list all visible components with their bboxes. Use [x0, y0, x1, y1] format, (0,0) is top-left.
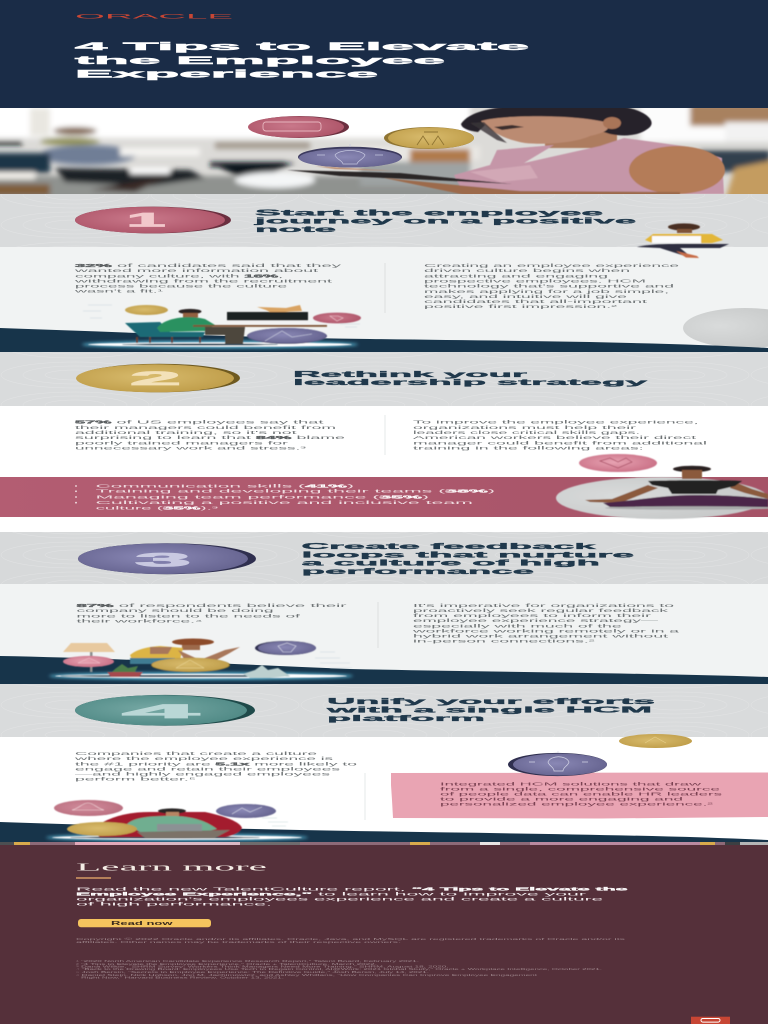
dark wave — [0, 328, 768, 352]
coin: heart — [579, 454, 657, 472]
footnotes: ² “4 Tips to Elevate the Employee Experience,” Oracle + TalentCulture, March 2022. — [76, 962, 378, 966]
right text: manager could benefit from additional — [413, 440, 707, 445]
right text — [424, 263, 682, 309]
right text: driven culture begins when — [424, 268, 633, 273]
copyright: Copyright © 2022 Oracle and/or its affiliates. Oracle, Java, and MySQL are registered trademarks of Oracle and/or its — [76, 937, 627, 941]
coin: gold top right — [619, 734, 692, 748]
feedback illustration — [49, 638, 353, 680]
grey circle — [683, 308, 768, 348]
pink callout: Integrated HCM solutions that draw — [440, 781, 705, 786]
blurred office background — [0, 108, 768, 194]
heading 2 — [293, 370, 650, 387]
neck — [545, 130, 617, 148]
title — [75, 41, 529, 80]
coin: chat — [248, 116, 349, 138]
number coin 3 — [78, 543, 256, 574]
footnotes: ⁵ Josh Bersin, “Secrets to Employee Experience: The Definitive Guide,” Josh Bersin, July 14, 2021. — [76, 970, 430, 974]
heading 4: Unify your efforts — [327, 697, 658, 706]
right text: technology that's supportive and — [424, 284, 677, 289]
left text: where the employee experience is — [75, 756, 333, 761]
section 2 content — [0, 406, 768, 532]
pink callout: from a single, comprehensive source — [440, 786, 723, 791]
left text: the #1 priority are 5.1x more likely to — [75, 761, 360, 766]
heading 3: a culture of high — [302, 559, 600, 568]
plant — [107, 664, 143, 677]
coin: chart — [247, 328, 327, 344]
footnotes: Right Now,” Harvard Business Review, October 13, 2021. — [81, 976, 285, 980]
report paragraph: of high performance. — [76, 902, 272, 907]
coin: gold — [151, 658, 230, 672]
person — [172, 638, 214, 646]
forearm — [384, 178, 680, 196]
monitor — [227, 312, 308, 321]
illustration: woman with laptop — [637, 223, 729, 258]
pink callout: personalized employee experience.² — [440, 802, 715, 807]
lamp — [63, 643, 115, 672]
Oracle logo: ORACLE — [75, 14, 233, 21]
footnotes: ³ Dana Wilkie, “SHRM Survey: Workers Think Managers Need More Training,” SHRM, August 18, 2020. — [76, 964, 449, 968]
arm — [629, 146, 725, 194]
number coin 1 — [75, 207, 231, 233]
left text: wasn't a fit.¹ — [75, 289, 165, 294]
number coin 4 — [75, 695, 255, 726]
heading 4: with a single HCM — [322, 705, 654, 714]
heading 2: leadership strategy — [293, 378, 650, 387]
left text: their workforce.⁴ — [76, 618, 203, 623]
number coin 2: 2 — [130, 368, 182, 390]
left text: perform better.⁵ — [75, 776, 197, 781]
heading 4 — [322, 697, 658, 723]
footnotes — [76, 959, 603, 980]
right text: from employees to inform their — [413, 613, 654, 618]
oracle badge — [691, 1017, 730, 1024]
pink callout: to provide a more engaging and — [440, 797, 686, 802]
face — [481, 116, 608, 144]
rose panel with skills list — [0, 477, 768, 517]
coin: pink — [63, 656, 114, 667]
number coin 1: 1 — [126, 210, 166, 232]
right text: leaders close critical skills gaps. — [413, 430, 640, 435]
right text: workforce working remotely or in a — [413, 629, 682, 634]
right text: It's imperative for organizations to — [413, 603, 677, 608]
heading 1 — [250, 208, 639, 234]
rose panel with skills list: Training and developing their teams ( 38% ) — [96, 489, 498, 494]
right text: American workers believe their direct — [413, 435, 699, 440]
left text: 57% of US employees say that — [75, 420, 327, 425]
legs — [603, 495, 768, 507]
coin: people — [125, 305, 168, 315]
right text: attracting and engaging — [424, 273, 611, 278]
cat — [257, 305, 302, 312]
left text: poorly trained managers for — [75, 440, 290, 445]
heading 3 — [302, 542, 637, 576]
right text: positive first impression.² — [424, 304, 620, 309]
footnotes: ¹ “2020 North American Candidate Experience Research Report,” Talent Board, February 2021. — [76, 959, 420, 963]
section 2 heading band — [0, 352, 768, 406]
right text: especially with much of the — [413, 623, 624, 628]
left text — [76, 603, 349, 623]
section 4 content — [0, 734, 768, 843]
header panel — [0, 0, 768, 108]
rose panel with skills list: culture ( 35% ).³ — [96, 505, 221, 510]
right text: To improve the employee experience, — [413, 420, 698, 425]
man — [178, 309, 202, 314]
section 3 content — [0, 584, 768, 684]
left text — [75, 420, 348, 450]
heading 2: Rethink your — [293, 370, 527, 379]
right text: Creating an employee experience — [424, 263, 682, 268]
heading 1: Start the employee — [255, 208, 606, 218]
title: the Employee — [75, 55, 445, 67]
heading 3: Create feedback — [302, 542, 598, 551]
woman with tablet — [287, 104, 725, 196]
desk — [193, 325, 327, 327]
left text: 32% of candidates said that they — [75, 263, 345, 268]
left text: Companies that create a culture — [75, 751, 320, 756]
footnotes: ⁴ “Back to the Drawing Board: Employees Use Tech to Regain Control, AI@Work: 2021 Global Study,” Oracle + Workplace Intelligence, October 2021. — [76, 967, 603, 971]
copyright — [76, 937, 627, 944]
pink callout — [391, 772, 768, 818]
right text: makes applying for a job simple, — [424, 289, 669, 294]
dark wave — [0, 656, 768, 684]
heading 3: loops that nurture — [302, 550, 637, 559]
number coin 3: 3 — [135, 550, 192, 572]
person — [158, 808, 186, 814]
footer panel — [0, 845, 768, 1024]
heading: learn more: Learn more — [76, 862, 269, 874]
report paragraph: Read the new TalentCulture report, “4 Tips to Elevate the — [76, 886, 630, 891]
button: read now: Read now — [111, 921, 173, 927]
blouse — [454, 138, 724, 194]
glow — [82, 341, 358, 348]
coin: blue — [255, 641, 316, 655]
report paragraph — [76, 886, 630, 907]
heading 1: note — [255, 225, 339, 234]
chair — [125, 322, 205, 337]
report paragraph: organization's employees experience and create a culture — [76, 897, 606, 902]
left text — [75, 751, 360, 781]
left text: more to listen to the needs of — [76, 613, 303, 618]
left text: their managers could benefit from — [75, 425, 338, 430]
left text: company culture, with 16% , — [75, 273, 283, 278]
right text: employee experience strategy— — [413, 618, 661, 623]
rose panel with skills list: Managing team performance ( 35% ) — [96, 494, 432, 499]
heading 3: performance — [302, 567, 537, 576]
back hair — [461, 104, 652, 136]
top — [648, 480, 742, 494]
title: Experience — [75, 68, 378, 80]
rose panel with skills list: Communication skills ( 41% ) — [96, 483, 357, 488]
platform illustration — [46, 800, 308, 841]
left text: withdrawing from the recruitment — [75, 278, 336, 283]
coin: people — [384, 127, 474, 149]
section 3 heading band — [0, 532, 768, 584]
left text — [75, 263, 345, 294]
pink callout: of people data can enable HR leaders — [440, 791, 722, 796]
heading 4: platform — [327, 714, 485, 723]
right text — [413, 420, 707, 450]
left text: —and highly engaged employees — [75, 771, 330, 776]
left text: wanted more information about — [75, 268, 321, 273]
left text: unnecessary work and stress.³ — [75, 445, 308, 450]
dark wave — [0, 822, 768, 843]
right text: organizations must help their — [413, 425, 638, 430]
left text: process because the culture — [75, 283, 290, 288]
report paragraph: Employee Experience,” to learn how to improve your — [76, 891, 589, 896]
section 1 content — [0, 247, 768, 352]
front hair strand — [470, 122, 507, 143]
yoga illustration — [556, 454, 768, 519]
accent rule — [76, 877, 111, 879]
arms — [585, 482, 768, 503]
section 4 heading band — [0, 684, 768, 737]
coin: gold — [67, 822, 137, 836]
coin: bulb — [508, 751, 607, 776]
coin: bulb — [298, 144, 402, 167]
dog — [243, 665, 290, 678]
right text: candidates that all-important — [424, 299, 651, 304]
number coin 4: 4 — [122, 701, 199, 723]
desk illustration — [82, 305, 361, 348]
hero photo — [0, 108, 768, 194]
title: 4 Tips to Elevate — [75, 41, 529, 53]
right text: prospective employees. HCM — [424, 278, 648, 284]
coin: pink — [54, 800, 123, 816]
right text: hybrid work arrangement without — [413, 634, 672, 639]
number coin 2 — [76, 364, 240, 392]
glow — [49, 672, 353, 680]
heading 1: journey on a positive — [250, 217, 639, 226]
coin: blue — [216, 804, 276, 818]
button: read now — [78, 919, 211, 927]
coin: heart — [313, 313, 361, 323]
left text: engage and retain their employees — [75, 766, 340, 771]
footnotes: ⁶ Daniel Stein, Nick Hobson, Jon M. Jachimowicz, and Ashley Whillans, “How Companies Can Improve Employee Engagement — [76, 973, 538, 977]
right text: easy, and intuitive will give — [424, 294, 630, 299]
rose panel with skills list: Cultivating a positive and inclusive team — [96, 500, 476, 505]
decorative strip — [0, 842, 768, 845]
right text — [413, 603, 682, 644]
copyright: affiliates. Other names may be trademarks of their respective owners. — [76, 940, 401, 944]
right text: training in the following areas: — [413, 445, 644, 450]
left text: 87% of respondents believe their — [76, 603, 349, 608]
tablet — [287, 170, 512, 184]
left text: company should be doing — [76, 608, 276, 613]
left text: additional training, so it's not — [75, 430, 300, 435]
right text: in-person connections.² — [413, 639, 597, 644]
section 1 heading band — [0, 194, 768, 247]
left text: surprising to learn that 84% blame — [75, 435, 348, 440]
glow — [46, 834, 308, 841]
right text: proactively seek regular feedback — [413, 608, 672, 613]
red chair — [90, 812, 242, 837]
